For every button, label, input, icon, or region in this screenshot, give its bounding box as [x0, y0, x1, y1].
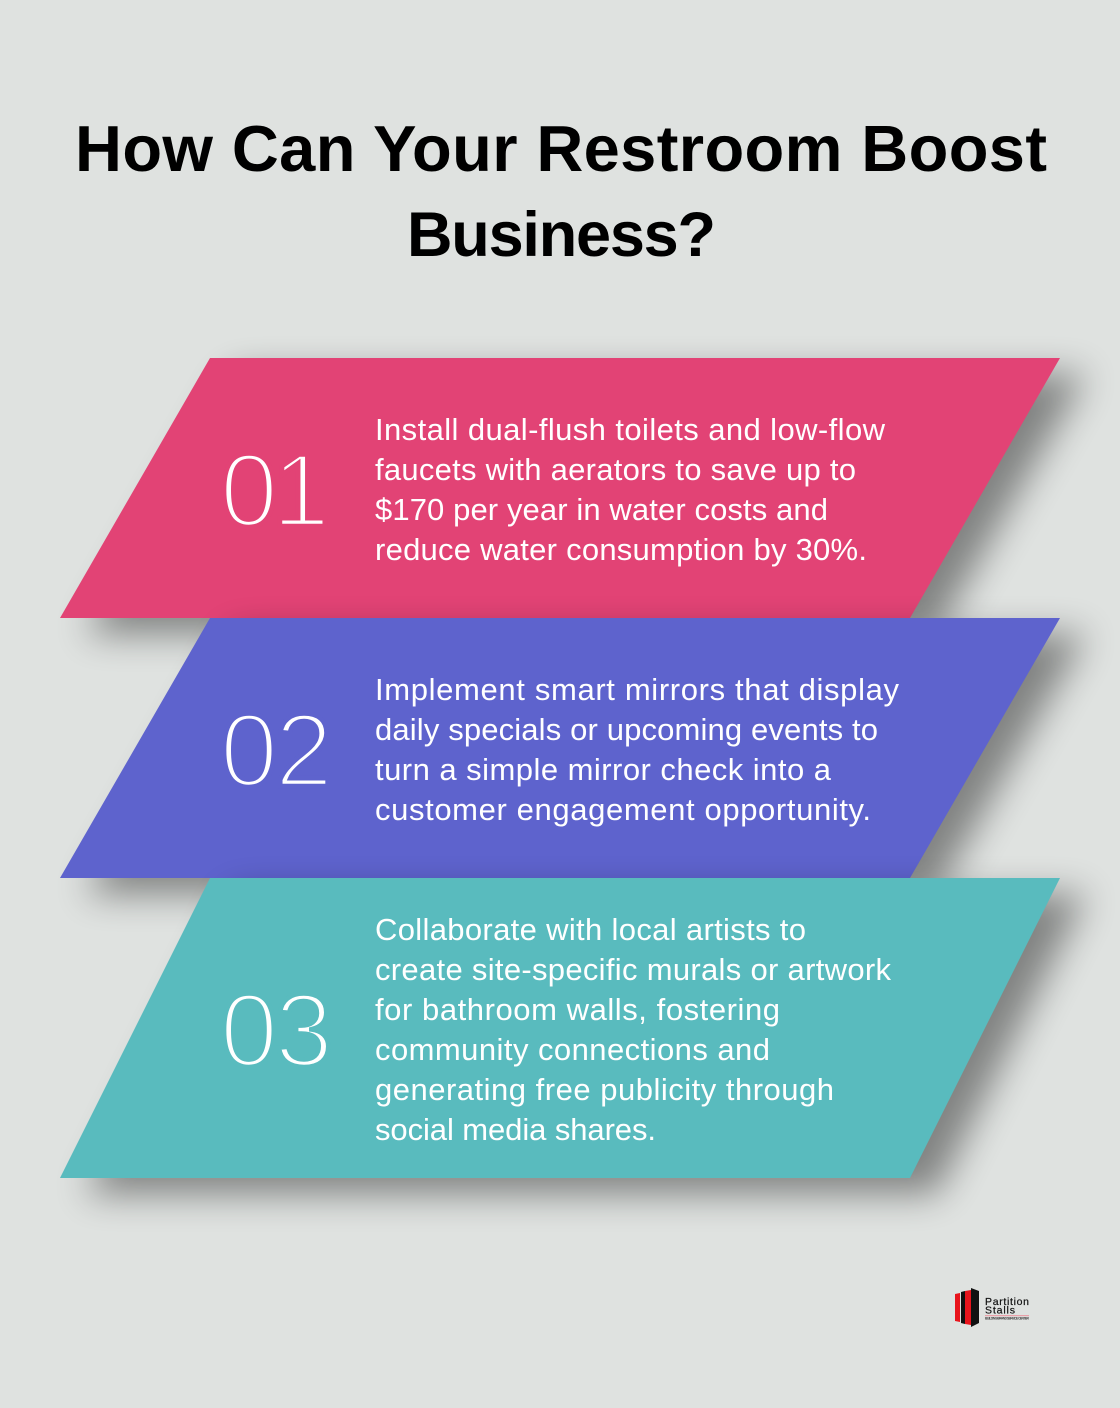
- panel: step 03: [60, 878, 1060, 1178]
- step 01 description: reduce water consumption by 30%.: [375, 532, 867, 567]
- title: [75, 112, 1047, 270]
- step 03 description: Collaborate with local artists to: [375, 912, 806, 947]
- title: How Can Your Restroom Boost: [75, 112, 1047, 185]
- title: Business?: [407, 200, 716, 270]
- step 02 description: [375, 672, 900, 827]
- logo: Partition Stalls: [955, 1288, 1030, 1327]
- step 03 description: for bathroom walls, fostering: [375, 992, 780, 1027]
- pink parallelogram: [60, 358, 1060, 618]
- step 02 description: turn a simple mirror check into a: [375, 752, 832, 787]
- icon: partition bars: [955, 1288, 979, 1327]
- logo: Partition Stalls: BUILDING BRAND SERVICE CENTER: [985, 1316, 1030, 1320]
- step 01 description: faucets with aerators to save up to: [375, 452, 856, 487]
- step 03 description: create site-specific murals or artwork: [375, 952, 892, 987]
- step 03 description: [375, 912, 892, 1147]
- step 02 description: daily specials or upcoming events to: [375, 712, 878, 747]
- step 02 description: Implement smart mirrors that display: [375, 672, 900, 707]
- teal parallelogram: [60, 878, 1060, 1178]
- step 03 description: community connections and: [375, 1032, 770, 1067]
- panel: step 02: [60, 618, 1060, 878]
- step 01 description: [375, 412, 886, 567]
- step 03 description: generating free publicity through: [375, 1072, 834, 1107]
- logo: Partition Stalls: Stalls: [985, 1304, 1015, 1316]
- step 01 description: $170 per year in water costs and: [375, 492, 828, 527]
- number 02: 02: [220, 693, 333, 809]
- number 01: 01: [220, 433, 330, 549]
- logo: Partition Stalls: Partition: [985, 1296, 1029, 1308]
- panel: step 01: [60, 358, 1060, 618]
- number 03: 03: [220, 973, 333, 1089]
- step 01 description: Install dual-flush toilets and low-flow: [375, 412, 886, 447]
- step 03 description: social media shares.: [375, 1112, 656, 1147]
- indigo parallelogram: [60, 618, 1060, 878]
- step 02 description: customer engagement opportunity.: [375, 792, 871, 827]
